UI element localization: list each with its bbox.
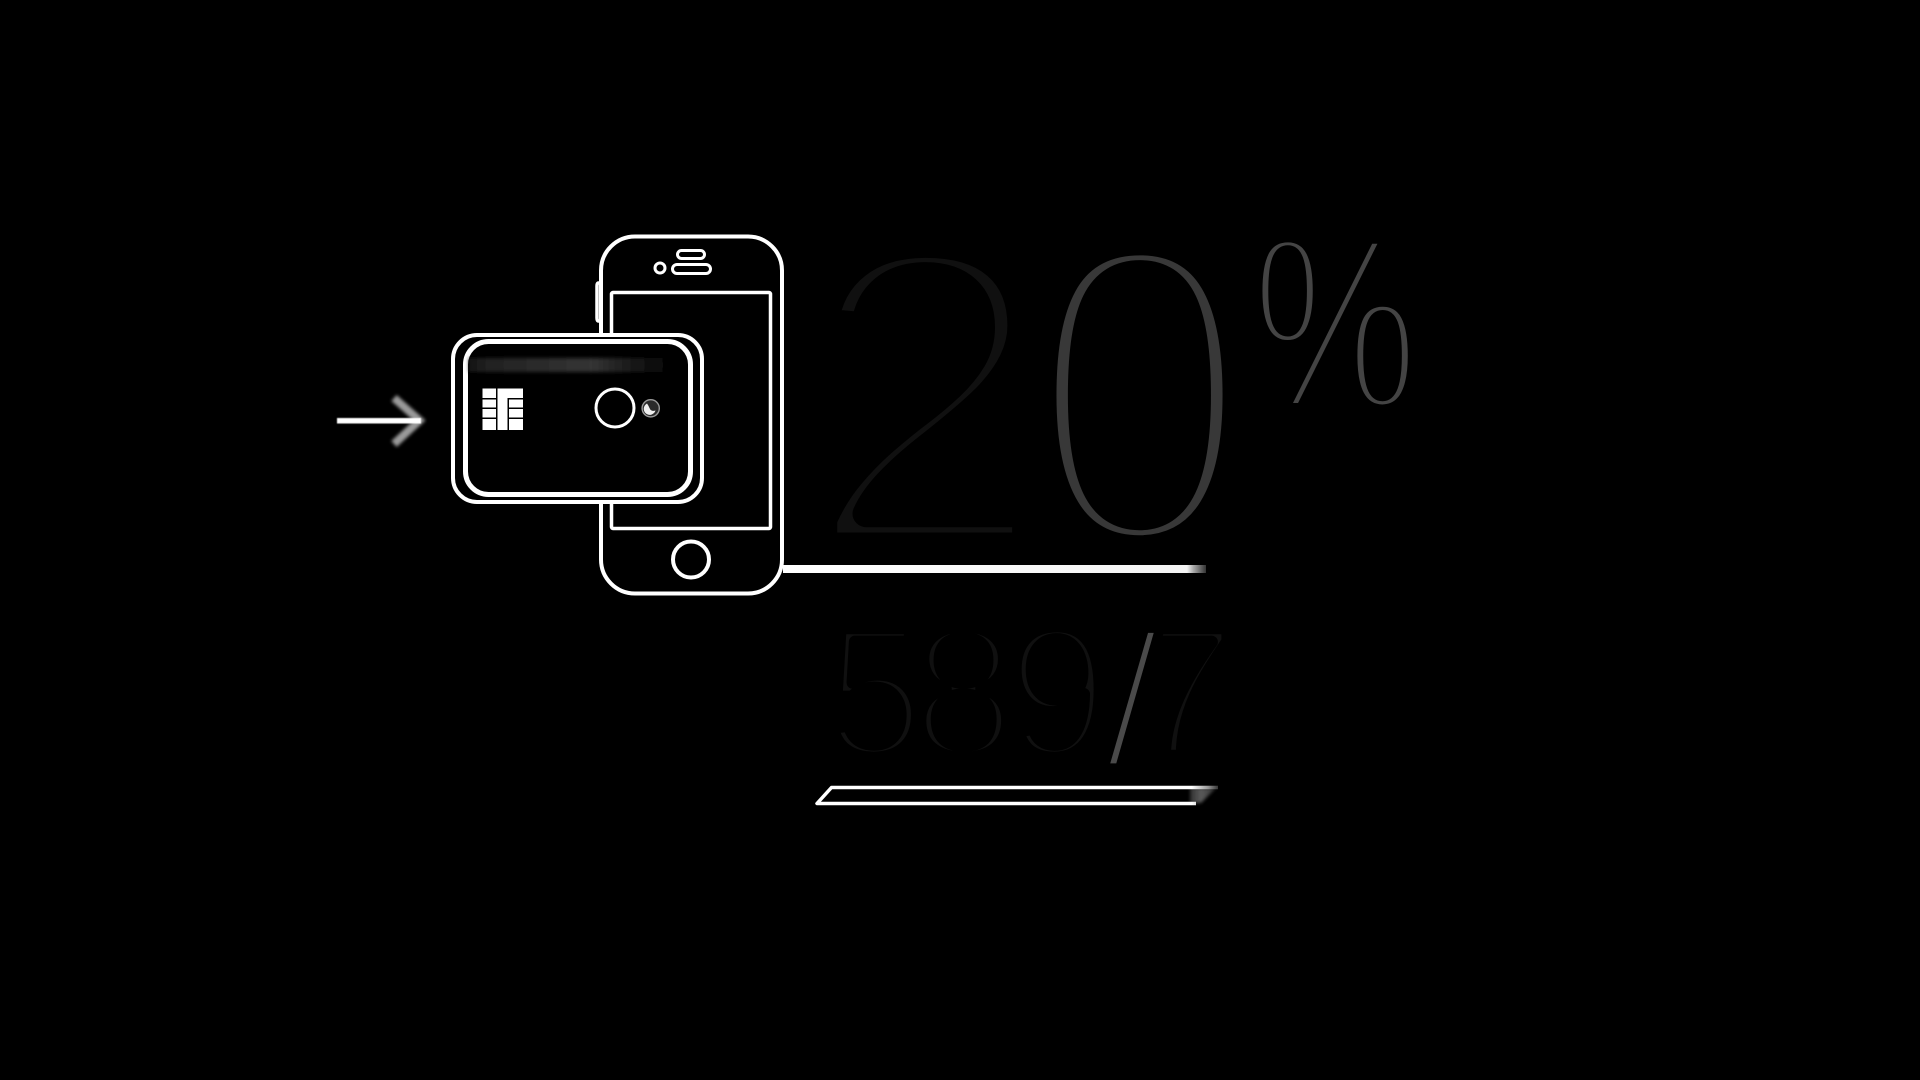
digit 2: 2: [801, 155, 1048, 638]
card small contactless dot: [642, 400, 659, 417]
digit 7: 7: [1130, 588, 1238, 796]
arrow shaft: [337, 418, 421, 424]
arrow chevron: [394, 398, 420, 444]
icon: smartphone: [597, 236, 782, 594]
phone screen: [612, 292, 770, 528]
percent sign: %: [1252, 186, 1418, 461]
icon: payment card: [453, 335, 702, 502]
phone body: [601, 236, 782, 594]
big number: 20%: [801, 153, 1418, 638]
progress line under 20%: [783, 565, 1206, 573]
phone camera: [655, 263, 665, 273]
phone lower speaker: [672, 264, 710, 274]
phone side button: [597, 283, 601, 321]
phone home button: [673, 542, 709, 578]
phone upper speaker: [678, 250, 704, 258]
card large circle: [596, 389, 634, 427]
card magnetic stripe: [469, 358, 674, 372]
card inner outline: [466, 342, 690, 494]
bar outline: [817, 788, 1218, 804]
arrow pointing to card: [337, 398, 421, 444]
digit 9: 9: [1007, 588, 1108, 796]
bar fading end: [1190, 788, 1216, 803]
card outer outline: [453, 335, 702, 502]
digit 0: 0: [1029, 153, 1250, 636]
progress bar parallelogram: [817, 788, 1218, 804]
card chip: [482, 388, 523, 430]
slash: /: [1104, 595, 1161, 807]
digit 5: 5: [826, 589, 924, 796]
counter: 589/7: [826, 588, 1238, 807]
digit 8: 8: [912, 589, 1015, 796]
